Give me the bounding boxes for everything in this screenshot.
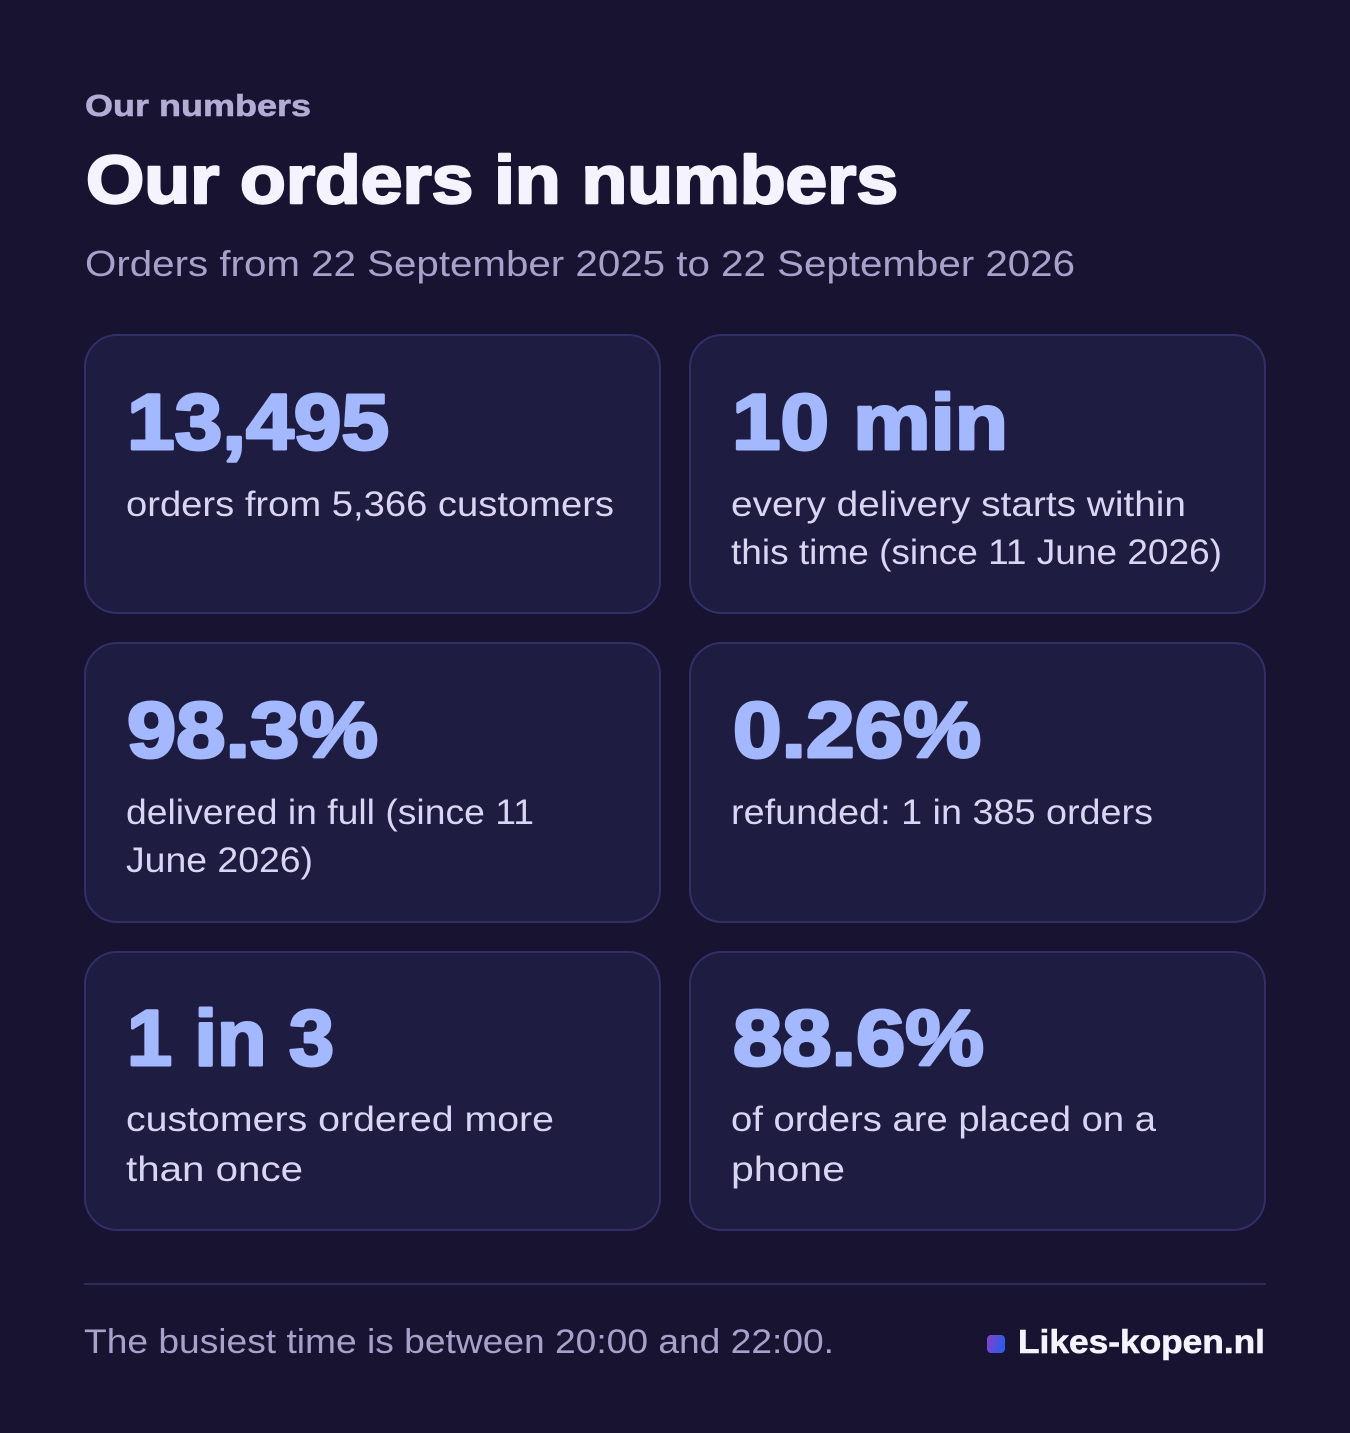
panel: repeat customers [85,952,660,1230]
label: customers ordered more [126,1099,554,1189]
panel: delivered in full [85,643,660,922]
stat: 98.3%: 98.3% [127,685,378,774]
label: orders from customers: orders from 5,366 customers [126,484,614,524]
label: orders on a phone: phone [731,1149,845,1189]
icon: brand square [987,1335,1005,1353]
brand name: Likes-kopen.nl [1018,1323,1265,1360]
label: customers ordered more: than once [126,1149,303,1189]
label: orders on a phone: of orders are placed on a [731,1099,1156,1139]
panel: total orders [85,335,660,613]
label: customers ordered more: customers ordered more [126,1099,554,1139]
label: refunded: refunded: 1 in 385 orders [731,792,1153,832]
label: delivered in full: June 2026) [126,840,313,880]
label: delivery starts [731,484,1222,572]
brand [987,1323,1265,1360]
subtitle: Orders from 22 September 2025 to 22 September 2026 [85,243,1075,284]
stat: 13,495: 13,495 [127,377,389,466]
label: delivery starts: this time (since 11 June 2026) [731,532,1222,572]
stat: 0.26%: 0.26% [733,685,981,774]
stat: 88.6%: 88.6% [733,993,984,1082]
label: delivery starts: every delivery starts within [731,484,1186,524]
panel: delivery start [690,335,1265,613]
label: delivered in full [126,792,534,880]
stat: 1 in 3: 1 in 3 [127,993,334,1082]
eyebrow: Our numbers [85,88,311,123]
label: orders on a phone [731,1099,1156,1189]
stat: 10 min: 10 min [732,377,1008,466]
footer note: The busiest time is between 20:00 and 22:00. [84,1323,834,1361]
panel: phone orders [690,952,1265,1230]
title: Our orders in numbers [86,142,898,218]
label: delivered in full: delivered in full (since 11 [126,792,534,832]
panel: refunded [690,643,1265,922]
